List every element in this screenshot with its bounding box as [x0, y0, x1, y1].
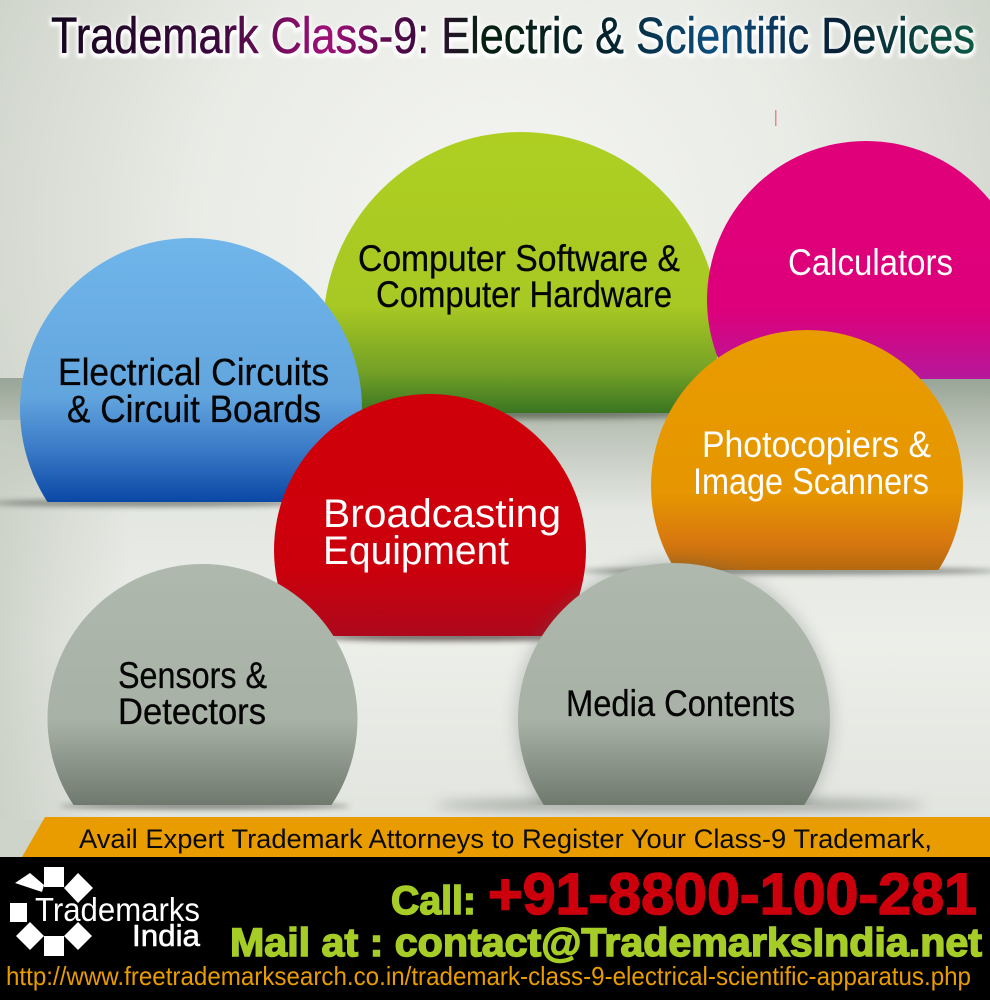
bubble: computer software and hardware: Computer Hardware	[376, 274, 672, 315]
bubble: photocopiers and scanners: Photocopiers &	[702, 424, 931, 465]
bubble: media contents	[438, 554, 922, 817]
bubble: electrical circuits: Electrical Circuits	[58, 352, 329, 394]
bubble: sensors and detectors: Detectors	[118, 691, 266, 732]
bubble: electrical circuits: & Circuit Boards	[67, 389, 321, 431]
logo: Trademarks India: India	[132, 918, 201, 953]
bubble: media contents: Media Contents	[566, 683, 795, 724]
bubble: broadcasting equipment: Equipment	[323, 529, 509, 573]
bubble: broadcasting equipment	[274, 394, 586, 646]
bubble: electrical circuits	[0, 238, 362, 510]
contact: phone: Call:	[391, 879, 476, 923]
bubble: photocopiers and scanners	[584, 330, 990, 578]
bubble: computer software and hardware	[324, 132, 718, 422]
bubble: calculators	[707, 141, 990, 379]
banner: expert attorneys: Avail Expert Trademark Attorneys to Register Your Class-9 Trademark,	[79, 824, 932, 854]
banner: expert attorneys	[22, 817, 990, 857]
bubble: photocopiers and scanners: Image Scanners	[693, 461, 929, 502]
footer panel	[0, 857, 990, 1000]
logo: Trademarks India: Trademarks	[35, 891, 200, 928]
contact: phone: +91-8800-100-281	[488, 862, 977, 927]
logo: Trademarks India	[10, 867, 201, 956]
bubble: sensors and detectors	[48, 564, 358, 813]
bubble: sensors and detectors: Sensors &	[118, 655, 267, 696]
bubble: computer software and hardware: Computer Software &	[358, 238, 680, 279]
contact: email: Mail at : contact@TrademarksIndia.net	[230, 921, 982, 965]
bubble: broadcasting equipment: Broadcasting	[323, 492, 561, 536]
bubble: calculators: Calculators	[788, 242, 953, 283]
